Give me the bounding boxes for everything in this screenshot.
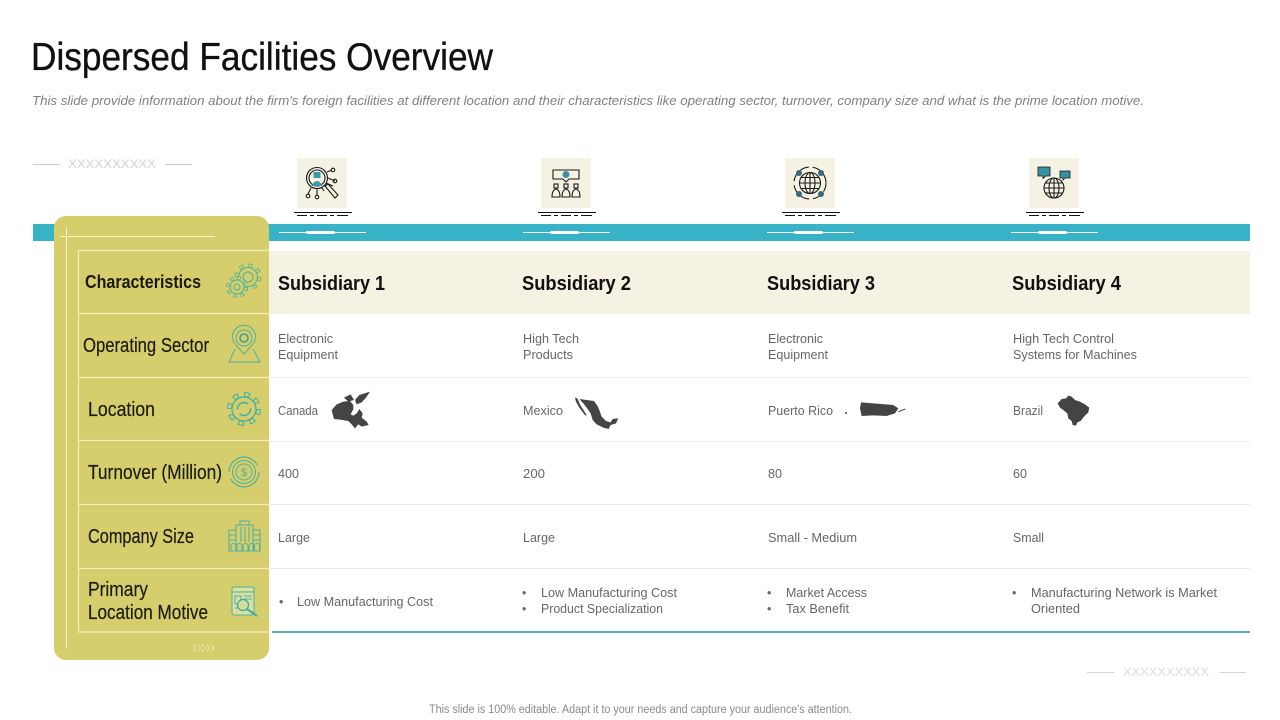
sidebar label: primary location motive: Primary	[88, 579, 148, 601]
row: primary location motive values: Tax Benefit	[786, 602, 850, 616]
row: turnover values: 80	[768, 467, 782, 481]
row: operating sector values: High Tech Control	[1013, 332, 1114, 346]
row: turnover values: 60	[1013, 467, 1027, 481]
icon: dollar cycle	[229, 457, 259, 487]
row: primary location motive values: Low Manufacturing Cost	[541, 586, 678, 600]
row: primary location motive values: •	[522, 602, 526, 616]
row: primary location motive values: Oriented	[1031, 602, 1080, 616]
footer note: This slide is 100% editable. Adapt it to your needs and capture your audience's attention.	[429, 704, 852, 716]
row: company size values: Large	[523, 531, 555, 545]
sidebar label: company size: Company Size	[88, 526, 194, 548]
map: Canada	[332, 392, 370, 428]
icon: office building	[229, 521, 260, 551]
row: operating sector values: Equipment	[768, 348, 829, 362]
row: operating sector values: High Tech	[523, 332, 579, 346]
row: turnover values: 200	[523, 467, 545, 481]
icon: document with magnifier	[232, 587, 257, 616]
icon: dollar cycle: $	[241, 467, 247, 479]
column headings: Subsidiary 3	[767, 273, 875, 295]
map: Puerto Rico	[845, 402, 905, 416]
column 4 icon: globe with chat bubbles	[1029, 158, 1079, 208]
column headings: Subsidiary 4	[1012, 273, 1122, 295]
row: operating sector values: Equipment	[278, 348, 339, 362]
sidebar label: characteristics: Characteristics	[85, 272, 201, 292]
column 3 icon underline	[782, 212, 840, 216]
row: operating sector values: Products	[523, 348, 573, 362]
row: primary location motive values: Low Manufacturing Cost	[297, 595, 434, 609]
row: primary location motive values	[279, 586, 1218, 616]
teal header bar	[33, 224, 1250, 241]
row: primary location motive values: •	[279, 595, 283, 609]
sidebar label: turnover: Turnover (Million)	[88, 462, 222, 484]
cream header band	[269, 251, 1250, 314]
column headings	[278, 273, 1122, 295]
bar accents	[279, 231, 1098, 234]
row: location values: Brazil	[1013, 404, 1043, 418]
title: Dispersed Facilities Overview	[31, 36, 494, 79]
sidebar label: operating sector: Operating Sector	[83, 335, 209, 357]
row: primary location motive values: •	[522, 586, 526, 600]
map: Mexico	[575, 398, 618, 429]
row: location values: Mexico	[523, 404, 563, 418]
placeholder ornament: bottom right: XXXXXXXXXX	[1123, 665, 1209, 679]
column 1 icon: magnifier with circuit nodes	[297, 158, 347, 208]
row: turnover values	[278, 467, 1027, 481]
table bottom rule	[272, 631, 1250, 633]
column headings: Subsidiary 1	[278, 273, 385, 295]
placeholder ornament: top left: XXXXXXXXXX	[68, 157, 156, 171]
row: operating sector values: Electronic	[278, 332, 333, 346]
map: Brazil	[1058, 396, 1089, 426]
row: location values: Puerto Rico	[768, 404, 833, 418]
row: company size values: Small	[1013, 531, 1044, 545]
column headings: Subsidiary 2	[522, 273, 631, 295]
row: company size values: Small - Medium	[768, 531, 857, 545]
row: turnover values: 400	[278, 467, 299, 481]
sidebar label: primary location motive: Location Motive	[88, 602, 208, 624]
row: operating sector values	[278, 332, 1137, 362]
icon: gear with cycle arrows	[230, 394, 258, 424]
row: primary location motive values: •	[767, 602, 771, 616]
row: company size values: Large	[278, 531, 310, 545]
table row dividers	[269, 377, 1250, 569]
column 2 icon underline	[538, 212, 596, 216]
subtitle: This slide provide information about the firm's foreign facilities at different location and their characteristics like operating sector, turnover, company size and what is the prime location motive.	[32, 94, 1144, 108]
column 3 icon: connected globe	[785, 158, 835, 208]
icon: gears	[228, 266, 260, 296]
row: primary location motive values: Manufacturing Network is Market	[1031, 586, 1218, 600]
row: location values	[278, 404, 1043, 418]
column 4 icon underline	[1026, 212, 1084, 216]
row: operating sector values: Systems for Machines	[1013, 348, 1137, 362]
row: location values: Canada	[278, 404, 318, 418]
row: primary location motive values: Product Specialization	[541, 602, 663, 616]
sidebar label: primary location motive	[88, 579, 208, 624]
row: primary location motive values: Market Access	[786, 586, 867, 600]
sidebar chevrons	[193, 644, 214, 652]
column 2 icon: team with idea bubble	[541, 158, 591, 208]
row: operating sector values: Electronic	[768, 332, 823, 346]
icon: location pin	[229, 325, 260, 362]
panel: characteristics sidebar	[54, 216, 269, 660]
row: primary location motive values: •	[1012, 586, 1016, 600]
column 1 icon underline	[294, 212, 352, 216]
sidebar label: location: Location	[88, 399, 155, 421]
row: primary location motive values: •	[767, 586, 771, 600]
row: company size values	[278, 531, 1044, 545]
